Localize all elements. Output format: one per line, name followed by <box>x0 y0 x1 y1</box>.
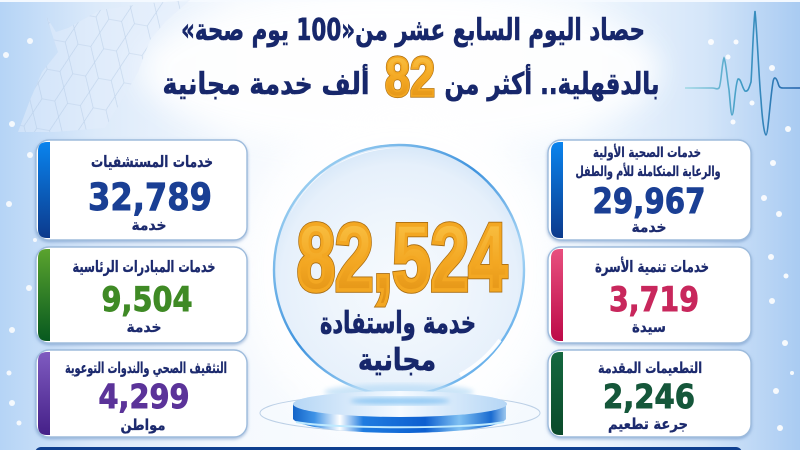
heading: خدمات تنمية الأسرة <box>595 257 709 276</box>
network dots: left <box>3 38 37 426</box>
panel: hospital services <box>36 140 247 240</box>
central sphere <box>257 128 541 412</box>
title line 1: حصاد اليوم السابع عشر من«100 يوم صحة» <box>181 13 645 48</box>
value: 4,299 <box>98 377 190 416</box>
unit: مواطن <box>120 416 166 434</box>
unit: خدمة <box>126 318 162 336</box>
unit: جرعة تطعيم <box>608 415 688 433</box>
heading line 2: والرعاية المتكاملة للأم والطفل <box>576 163 720 180</box>
caption line 2: مجانية <box>358 343 436 378</box>
icon: heartbeat line <box>685 11 800 135</box>
panel: vaccinations <box>548 350 751 437</box>
network dots: right <box>708 39 794 431</box>
heading line 1: خدمات الصحية الأولية <box>593 144 701 161</box>
heading: خدمات المستشفيات <box>91 152 213 171</box>
panel: family development <box>548 247 751 343</box>
value: 2,246 <box>603 377 695 416</box>
title gold number: 82 <box>385 45 435 108</box>
title line 2: right part: بالدقهلية.. أكثر من <box>444 64 660 102</box>
total caption <box>320 306 476 378</box>
value: 29,967 <box>592 182 706 222</box>
heading: التطعيمات المقدمة <box>598 359 702 377</box>
value: 3,719 <box>609 280 699 320</box>
title line 2: left part: ألف خدمة مجانية <box>162 64 370 102</box>
pedestal <box>260 391 540 433</box>
unit: خدمة <box>132 216 166 234</box>
title gold number: 82 <box>385 45 435 108</box>
unit: سيدة <box>632 318 666 336</box>
panel: health education <box>36 350 247 437</box>
title <box>162 13 660 102</box>
total number: 82,524 <box>297 205 507 311</box>
footer bar <box>35 447 742 450</box>
decorative hexagon map <box>18 0 190 132</box>
value: 9,504 <box>102 280 192 320</box>
value: 32,789 <box>88 176 212 219</box>
panel: presidential initiatives <box>36 247 247 343</box>
caption line 1: خدمة واستفادة <box>320 306 476 341</box>
heading: خدمات المبادرات الرئاسية <box>72 257 216 276</box>
panel: primary health care <box>548 140 751 240</box>
unit: خدمة <box>632 218 666 236</box>
total number: 82,524 <box>297 205 507 311</box>
heading: التثقيف الصحي والندوات التوعوية <box>65 359 227 377</box>
